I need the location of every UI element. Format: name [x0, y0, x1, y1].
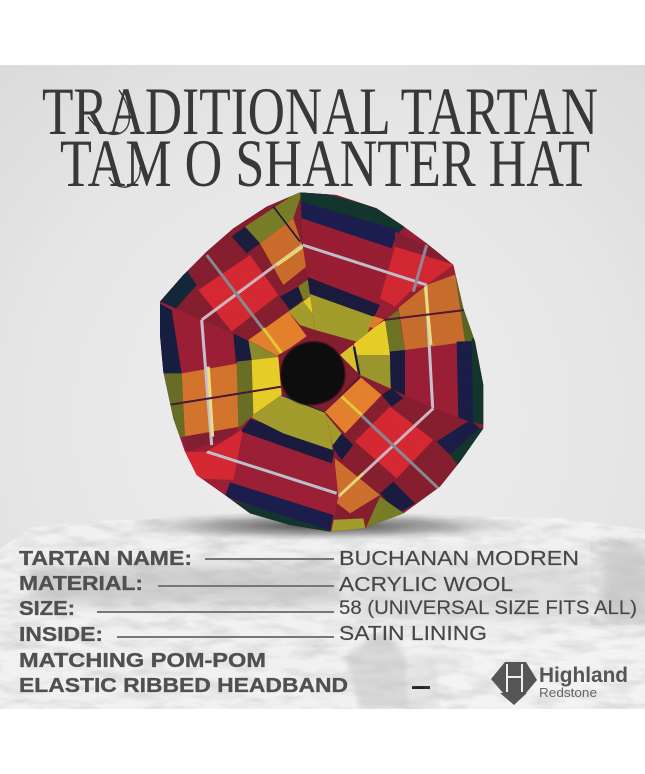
logo: Highland Redstone: Redstone: [539, 685, 597, 700]
panel: left: [160, 302, 282, 452]
panel: lower right: [325, 376, 484, 532]
row: inside: INSIDE:: [19, 623, 103, 646]
panel: right: [340, 265, 484, 424]
panel: bottom left: [185, 395, 338, 532]
row: matching pom-pom: MATCHING POM-POM: [19, 649, 266, 672]
row: material: ACRYLIC WOOL: [339, 573, 513, 596]
row: elastic ribbed headband: ELASTIC RIBBED HEADBAND: [19, 674, 348, 697]
panel: top: [300, 192, 454, 342]
row: tartan name: TARTAN NAME:: [19, 547, 192, 570]
panel: upper left: [160, 192, 315, 356]
title: [42, 73, 598, 201]
logo: Highland Redstone: Highland: [539, 664, 628, 687]
row: size: [19, 597, 637, 620]
stone plinth: [0, 516, 645, 709]
pom-pom: [281, 342, 345, 405]
row: tartan name: BUCHANAN MODREN: [339, 547, 579, 570]
row: inside: [19, 622, 487, 646]
shadow under hat: [120, 511, 530, 541]
row: tartan name: [19, 547, 579, 570]
spec list: [19, 547, 637, 672]
row: size: SIZE:: [19, 597, 75, 620]
logo: Highland Redstone: [491, 662, 628, 705]
row: size: 58 (UNIVERSAL SIZE FITS ALL): [339, 598, 637, 619]
tartan hat: [160, 192, 484, 532]
twill weave texture: [150, 185, 495, 535]
row: material: [19, 572, 513, 596]
row: material: MATERIAL:: [19, 572, 143, 595]
row: inside: SATIN LINING: [339, 622, 487, 645]
